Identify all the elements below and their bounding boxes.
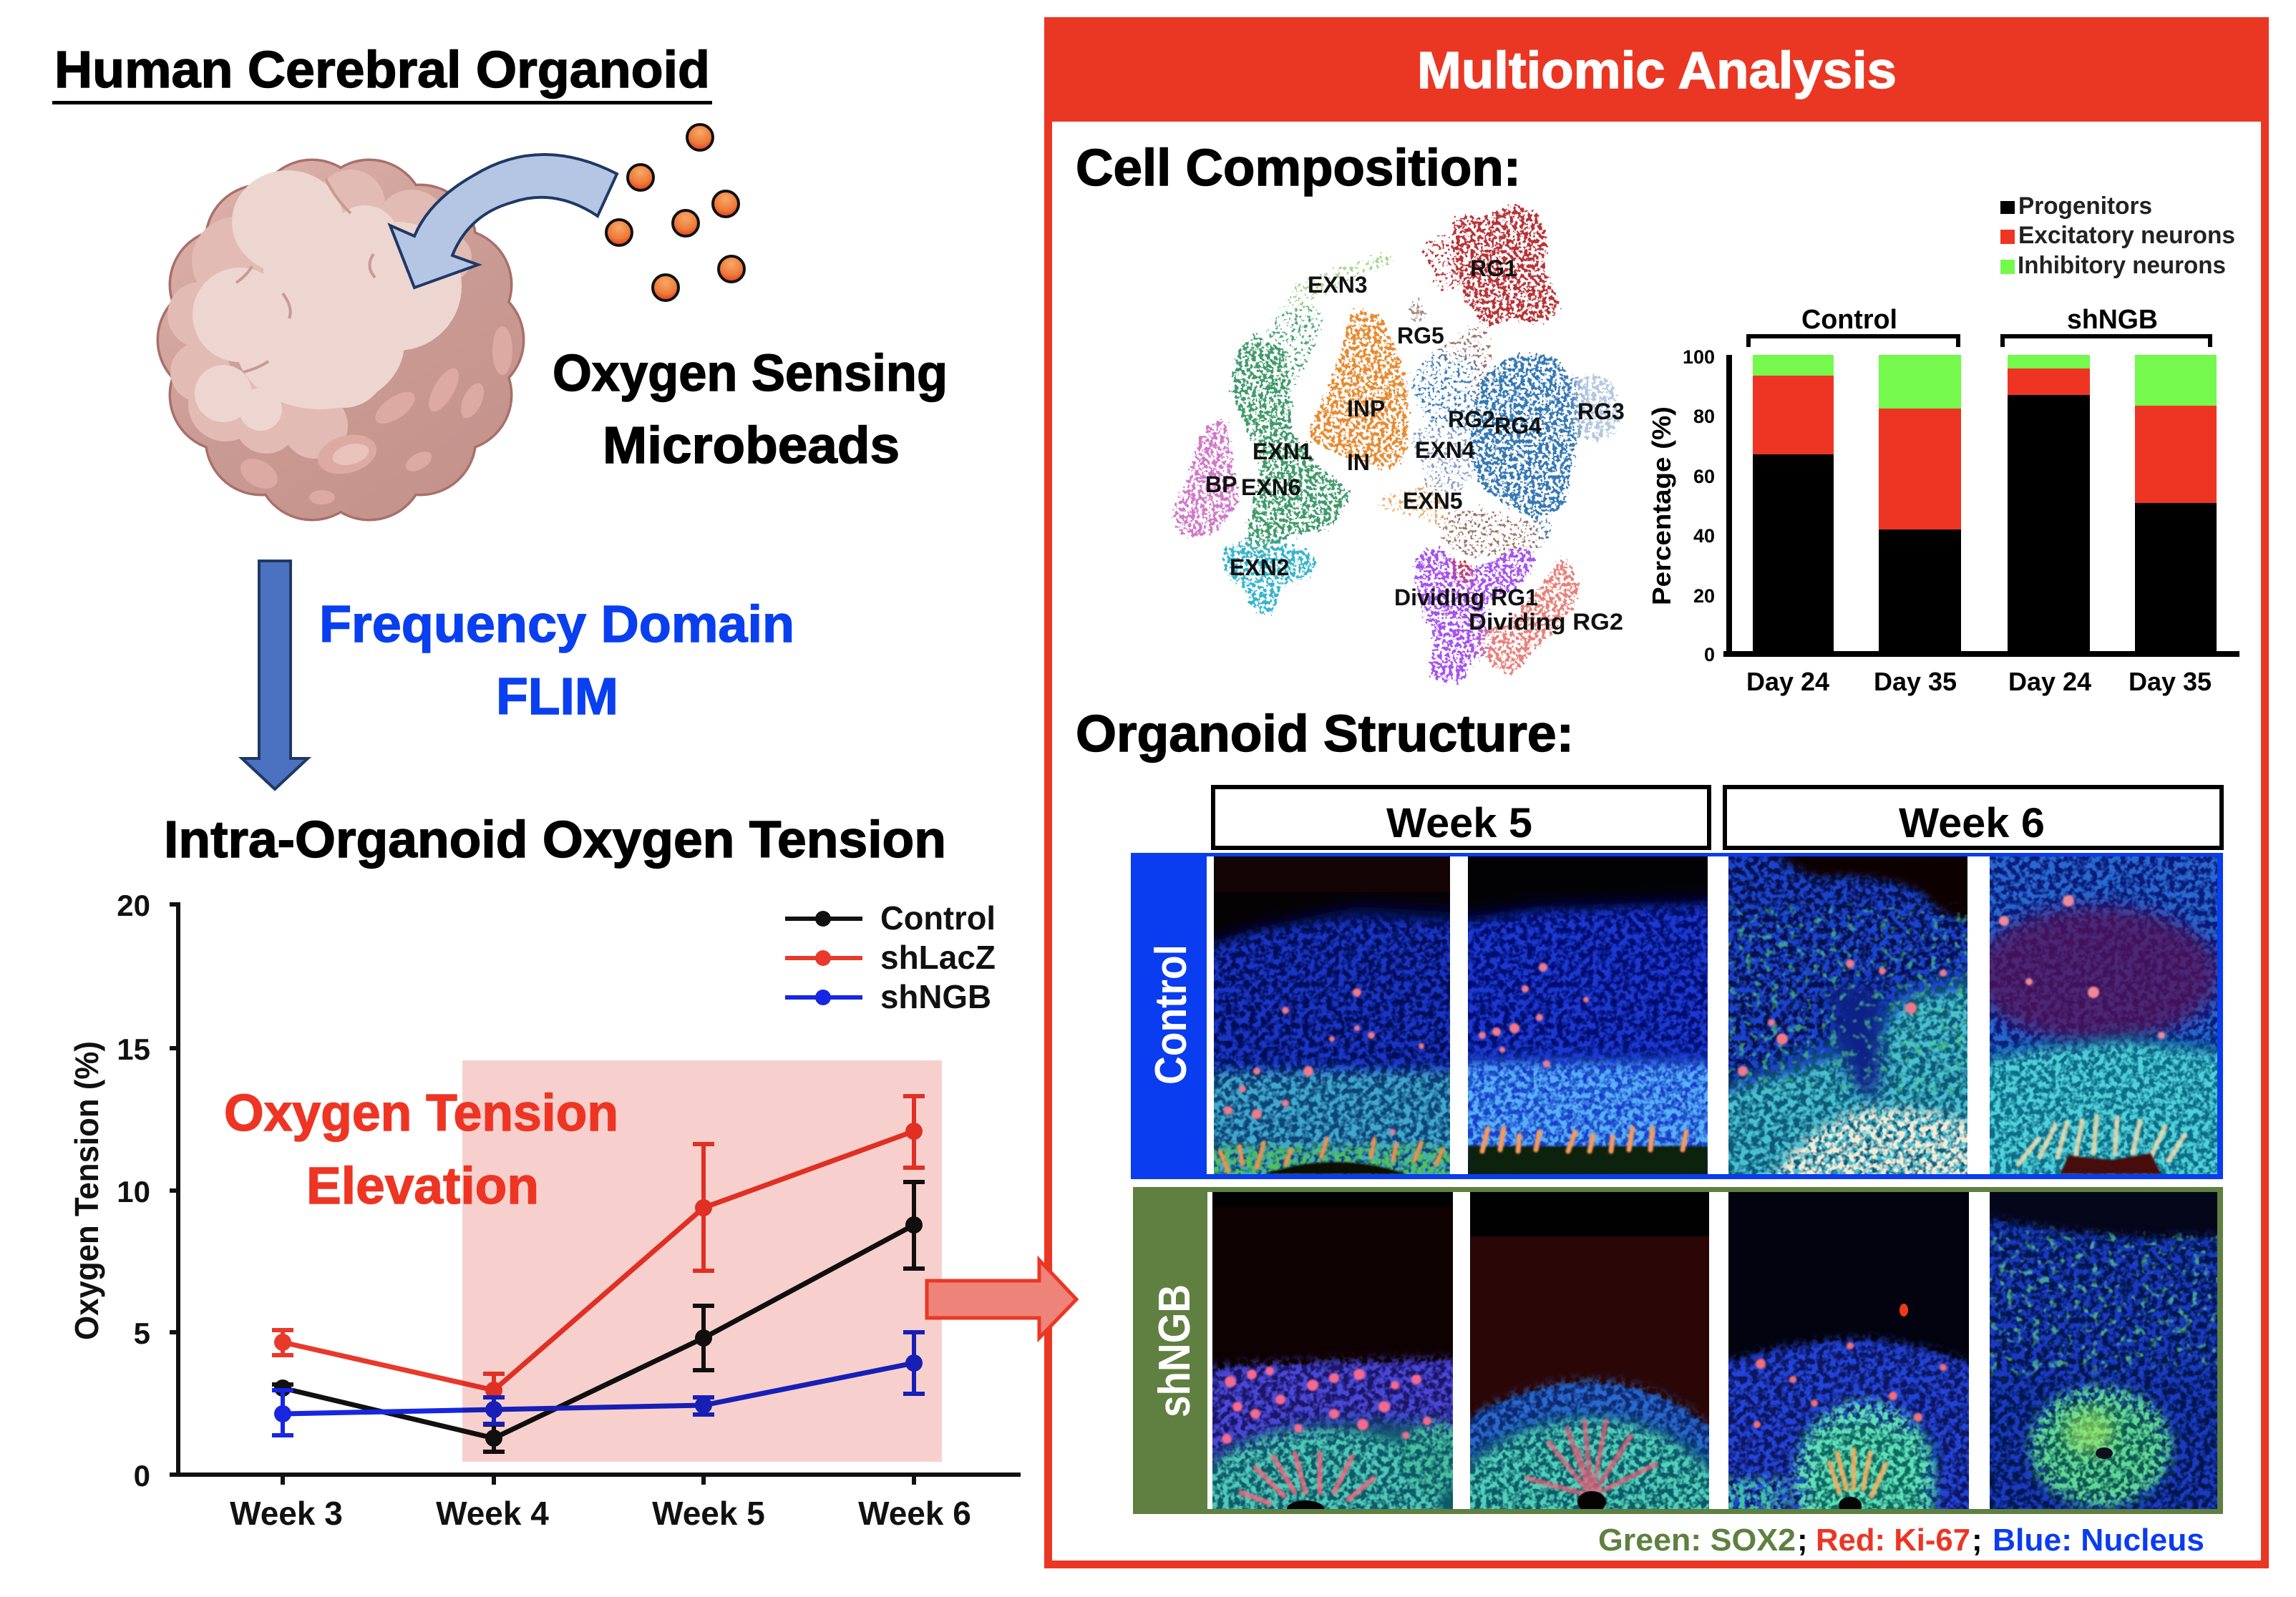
legend: Inhibitory neurons — [2018, 252, 2226, 279]
day labels: Day 35 — [1874, 667, 1957, 696]
y axis tick labels — [117, 889, 150, 1493]
column header: Week 6: Week 6 — [1899, 800, 2045, 846]
y axis tick labels: 5 — [134, 1317, 150, 1350]
arrow: down from organoid to chart — [242, 561, 308, 789]
day labels — [1746, 667, 2212, 696]
group labels: shNGB — [2067, 305, 2158, 335]
label: Control: Control — [1147, 944, 1196, 1085]
illustration: cerebral organoid — [159, 161, 522, 519]
series: shLacZ — [272, 1096, 925, 1399]
x axis labels: Week 4 — [436, 1495, 549, 1532]
tick labels: 80 — [1693, 406, 1715, 427]
bar: Control Day 24 — [1753, 355, 1834, 653]
header bar — [1044, 17, 2269, 122]
heading: Multiomic Analysis: Multiomic Analysis — [1417, 42, 1897, 99]
y axis tick labels: 10 — [117, 1175, 150, 1208]
caption: stain legend: Blue: Nucleus — [1993, 1523, 2204, 1558]
group labels — [1801, 305, 2158, 335]
legend: shLacZ — [880, 939, 996, 976]
column header: Week 5: Week 5 — [1386, 800, 1532, 846]
tick labels — [1683, 346, 1715, 665]
micrograph: shNGB week 6 a — [1728, 1192, 1969, 1509]
arrow: to multiomic analysis — [927, 1260, 1076, 1338]
legend: shNGB — [880, 978, 991, 1015]
arrow: curved microbead arrow — [390, 155, 617, 288]
cluster labels: RG4 — [1494, 413, 1542, 439]
cluster labels: INP — [1347, 396, 1385, 421]
y axis title: Oxygen Tension (%) — [68, 1041, 105, 1340]
legend — [2000, 192, 2235, 279]
axis title: Percentage (%) — [1647, 406, 1676, 605]
mid-tone ring — [167, 170, 472, 459]
micrograph: shNGB week 5 a — [1212, 1192, 1453, 1509]
line chart: oxygen tension over weeks — [68, 889, 1021, 1532]
row: shNGB images — [1133, 1187, 2247, 1571]
micrograph: Control week 6 b — [1990, 856, 2217, 1174]
cluster labels: RG5 — [1397, 323, 1444, 348]
highlight: elevation window — [462, 1060, 942, 1462]
x axis labels: Week 5 — [652, 1495, 765, 1532]
axes — [1723, 355, 2239, 654]
label: Frequency Domain FLIM: Frequency Domain — [319, 596, 794, 653]
x axis labels — [230, 1495, 971, 1532]
label: Frequency Domain FLIM — [319, 596, 794, 726]
tick labels: 60 — [1693, 466, 1715, 487]
x axis labels: Week 3 — [230, 1495, 343, 1532]
caption: stain legend: ; — [1797, 1523, 1808, 1558]
day labels: Day 24 — [1746, 667, 1829, 696]
legend: Progenitors — [2018, 192, 2152, 220]
caption: stain legend — [1598, 1523, 2204, 1558]
cluster labels: EXN5 — [1403, 488, 1463, 514]
cluster labels: EXN1 — [1252, 439, 1313, 464]
bar: shNGB Day 35 — [2135, 355, 2217, 653]
micrograph: shNGB week 5 b — [1470, 1192, 1709, 1509]
group brackets — [1748, 336, 2210, 347]
outer lobes with outline — [159, 161, 522, 519]
bar: shNGB Day 24 — [2008, 355, 2090, 653]
icon: oxygen sensing microbeads — [606, 124, 744, 301]
label: shNGB: shNGB — [1150, 1284, 1200, 1417]
stacked bar chart: cell composition — [1647, 192, 2239, 696]
folds and lower lumps — [236, 179, 375, 372]
heading: Intra-Organoid Oxygen Tension: Intra-Organoid Oxygen Tension — [164, 811, 946, 869]
group labels: Control — [1801, 305, 1897, 335]
day labels: Day 24 — [2008, 667, 2091, 696]
tick labels: 20 — [1693, 585, 1715, 607]
cluster labels: RG2 — [1448, 406, 1495, 432]
label: Oxygen Sensing Microbeads: Microbeads — [603, 417, 900, 474]
label: Oxygen Sensing Microbeads — [553, 345, 948, 474]
x axis labels: Week 6 — [858, 1495, 971, 1532]
lightest lobes — [193, 170, 462, 431]
row: Control images — [1131, 828, 2247, 1214]
callout: Oxygen Tension Elevation: Oxygen Tension — [224, 1085, 618, 1142]
caption: stain legend: ; — [1972, 1523, 1983, 1558]
micrograph: Control week 5 a — [1214, 856, 1450, 1174]
day labels: Day 35 — [2129, 667, 2212, 696]
heading: Cell Composition: Cell Composition: — [1076, 140, 1521, 197]
column header: Week 6 — [1725, 787, 2222, 848]
cluster labels: BP — [1205, 472, 1237, 497]
cluster labels — [1205, 255, 1625, 635]
heading: Organoid Structure: Organoid Structure: — [1076, 705, 1574, 763]
micrograph: Control week 6 a — [1728, 856, 1967, 1174]
micrograph: Control week 5 b — [1468, 856, 1708, 1174]
tick labels: 0 — [1704, 644, 1715, 665]
cluster labels: RG3 — [1577, 399, 1625, 424]
y axis tick labels: 15 — [117, 1032, 150, 1066]
cluster labels: EXN3 — [1308, 272, 1368, 298]
y axis tick labels: 0 — [134, 1459, 150, 1493]
legend: Control — [880, 899, 996, 937]
legend — [785, 899, 996, 1015]
cluster labels: EXN2 — [1230, 555, 1290, 580]
bar: Control Day 35 — [1879, 355, 1961, 653]
panel: Multiomic Analysis — [1044, 17, 2269, 1571]
column header: Week 5 — [1213, 787, 1709, 848]
label: Frequency Domain FLIM: FLIM — [496, 668, 618, 726]
cluster labels: EXN6 — [1241, 474, 1301, 500]
umap: cell clusters — [1174, 207, 1625, 682]
cluster labels: EXN4 — [1415, 437, 1475, 463]
cluster labels: IN — [1347, 449, 1370, 475]
series: shNGB — [272, 1332, 925, 1435]
title: Human Cerebral Organoid: Human Cerebral Organoid — [54, 41, 710, 99]
tick labels: 40 — [1693, 525, 1715, 547]
caption: stain legend: Red: Ki-67 — [1816, 1523, 1970, 1558]
cluster labels: RG1 — [1470, 255, 1517, 281]
y axis tick labels: 20 — [117, 889, 150, 922]
callout: Oxygen Tension Elevation: Elevation — [306, 1158, 539, 1215]
callout: Oxygen Tension Elevation — [224, 1085, 618, 1215]
caption: stain legend: Green: SOX2 — [1598, 1523, 1796, 1558]
tick labels: 100 — [1683, 346, 1715, 368]
label: Oxygen Sensing Microbeads: Oxygen Sensing — [553, 345, 948, 402]
cluster labels: Dividing RG1 — [1394, 585, 1538, 610]
series: Control — [272, 1182, 925, 1452]
legend: Excitatory neurons — [2018, 222, 2235, 249]
cluster labels: Dividing RG2 — [1469, 609, 1623, 635]
micrograph: shNGB week 6 b — [1990, 1192, 2217, 1509]
y axis and x axis — [170, 904, 1021, 1485]
